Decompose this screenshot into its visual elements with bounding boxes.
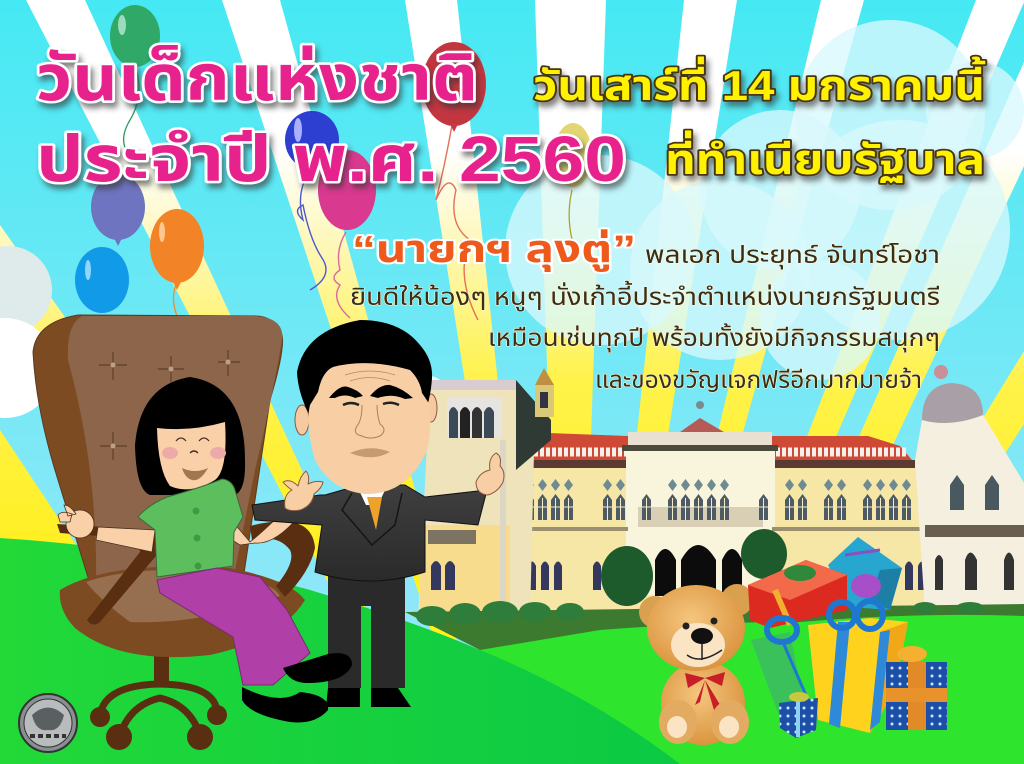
hedge and lawn [405, 601, 1024, 650]
girl [58, 377, 310, 685]
palm trees [601, 529, 787, 606]
girl face [157, 422, 226, 489]
gift: green translucent box [751, 632, 806, 718]
title: วันเด็กแห่งชาติ [36, 42, 478, 114]
balloon: red [422, 42, 486, 320]
upper windows [510, 493, 913, 520]
chair tufting [99, 350, 240, 460]
chair seat [60, 566, 305, 657]
chair base [90, 650, 227, 750]
date and venue [533, 56, 986, 183]
teddy body [661, 661, 745, 745]
gift: red box [748, 560, 847, 628]
body text: และของขวัญแจกฟรีอีกมากมายจ้า [595, 367, 922, 394]
clouds [0, 20, 1024, 425]
date and venue: วันเสาร์ที่ 14 มกราคมนี้ [533, 56, 986, 109]
small turret [535, 368, 554, 417]
gift: yellow tall box [808, 618, 908, 733]
chair arms [250, 521, 315, 597]
balloon: orange [150, 209, 204, 318]
left tower [418, 380, 551, 620]
teddy bear [639, 584, 753, 745]
man hair [297, 320, 432, 420]
balloon: light blue [75, 247, 129, 313]
girl shirt [138, 479, 243, 577]
man shirt and tie [342, 488, 402, 545]
balloon: green [110, 5, 160, 160]
teddy bow [685, 672, 725, 710]
man [252, 320, 504, 707]
nickname heading: “นายกฯ ลุงตู่” [352, 229, 636, 272]
girl pants [157, 568, 310, 685]
balloon: blue [285, 111, 339, 290]
body text: พลเอก ประยุทธ์ จันทร์โอชา [645, 242, 940, 270]
chair [33, 315, 315, 750]
cornice [532, 527, 628, 531]
man hands [283, 453, 504, 511]
ground: left hill [0, 538, 680, 764]
title: ประจำปี พ.ศ. 2560 [36, 123, 626, 195]
lower windows [530, 562, 924, 590]
teddy ears [639, 584, 753, 628]
central pavilion [622, 401, 778, 595]
title [36, 42, 626, 195]
gift: bows [767, 601, 883, 700]
man trousers [328, 570, 405, 688]
ground: right hill [480, 615, 1024, 764]
diamond windows [533, 479, 911, 491]
man shoes [326, 688, 411, 707]
balloon: pink [318, 150, 376, 318]
man face [308, 363, 430, 494]
government house building [405, 365, 1024, 650]
gift: orange small box [886, 646, 947, 730]
gift boxes [748, 537, 947, 738]
man jacket [252, 485, 487, 581]
teddy head [647, 585, 745, 671]
balloons [75, 5, 592, 320]
main facade [530, 460, 924, 610]
right tower and dome [915, 365, 1024, 612]
body text [350, 242, 940, 394]
red roof [508, 433, 915, 468]
body text: เหมือนเช่นทุกปี พร้อมทั้งยังมีกิจกรรมสนุกๆ [488, 322, 940, 353]
balloon: yellow [558, 123, 590, 239]
teddy face [671, 618, 725, 667]
balloon: purple [91, 174, 145, 246]
date and venue: ที่ทำเนียบรัฐบาล [665, 130, 985, 183]
emblem seal [19, 694, 77, 752]
girl arms [58, 505, 300, 552]
teddy feet [659, 700, 749, 744]
gift: teal box [828, 537, 902, 610]
girl shoes [242, 653, 352, 722]
entrance arches [655, 545, 742, 596]
body text: ยินดีให้น้องๆ หนูๆ นั่งเก้าอี้ประจำตำแหน่งนายกรัฐมนตรี [350, 280, 940, 312]
man ears [295, 394, 437, 435]
chair back [33, 315, 282, 600]
girl hair [135, 377, 245, 495]
gift: small blue box [779, 692, 818, 738]
